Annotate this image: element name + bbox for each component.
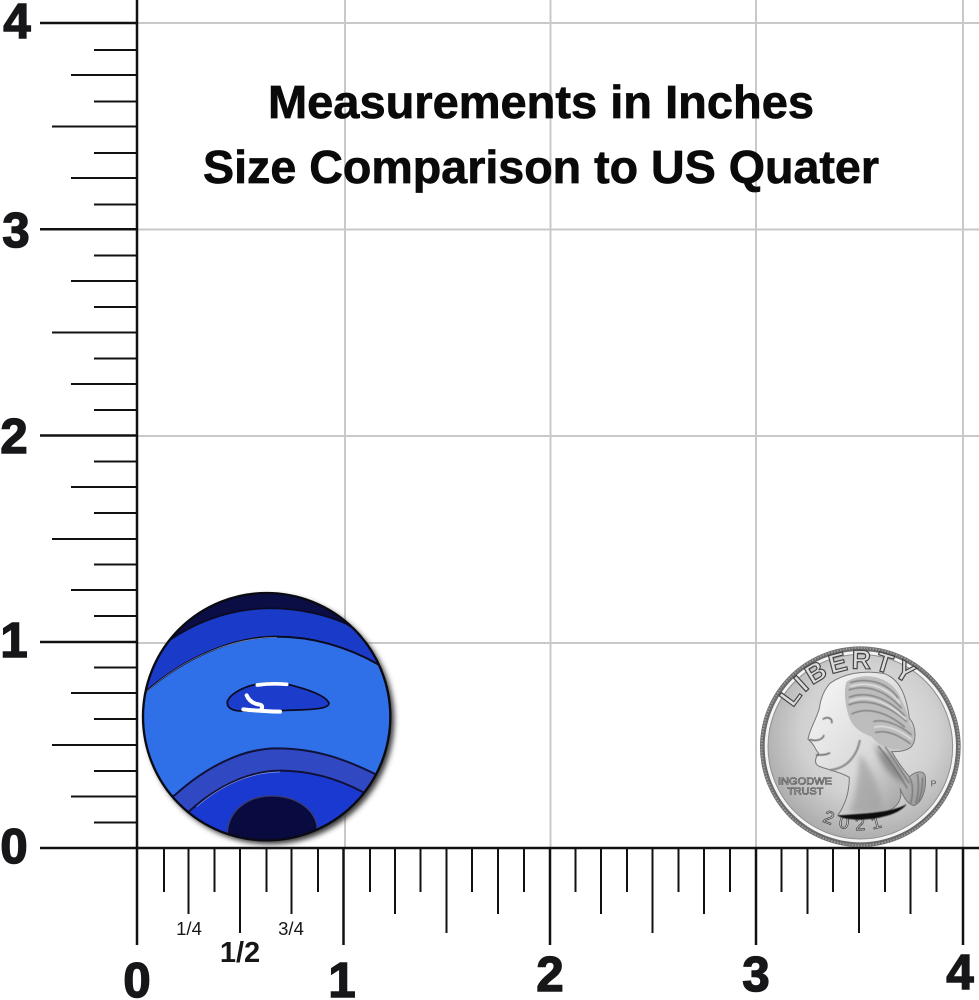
Washington portrait (808, 672, 926, 820)
mint mark: P (931, 779, 937, 789)
vertical axis numbers: 1 (0, 614, 28, 668)
title: Measurements in Inches (268, 76, 814, 128)
neck shading (850, 753, 883, 813)
vertical axis numbers: 0 (0, 820, 28, 874)
vertical axis numbers (0, 0, 31, 874)
2021 lettering: 2021 (822, 810, 882, 831)
face shading (809, 718, 860, 770)
horizontal axis numbers (123, 946, 974, 1000)
title (203, 76, 879, 193)
fraction labels: 1/4 (176, 918, 202, 939)
hair strands (849, 681, 923, 803)
LIBERTY lettering: LIBERTY (778, 650, 918, 708)
fraction labels: 3/4 (278, 918, 304, 939)
storm spot (227, 683, 329, 712)
vertical axis numbers: 2 (0, 410, 28, 464)
IN GOD WE TRUST lettering: TRUST (787, 787, 823, 798)
vertical ruler (40, 0, 137, 945)
icon: Neptune enamel pin (141, 591, 399, 847)
grid lines (137, 0, 979, 848)
horizontal ruler (40, 848, 979, 945)
IN GOD WE TRUST lettering (778, 777, 832, 798)
horizontal axis numbers: 4 (946, 946, 974, 1000)
title: Size Comparison to US Quater (203, 141, 879, 193)
IN GOD WE TRUST lettering: INGODWE (778, 777, 832, 788)
fraction labels: 1/2 (220, 937, 260, 969)
bust shadow (837, 804, 907, 820)
fraction labels (176, 918, 304, 969)
icon: US quarter coin (760, 646, 961, 847)
hair mass (845, 676, 914, 749)
vertical axis numbers: 3 (2, 204, 30, 258)
